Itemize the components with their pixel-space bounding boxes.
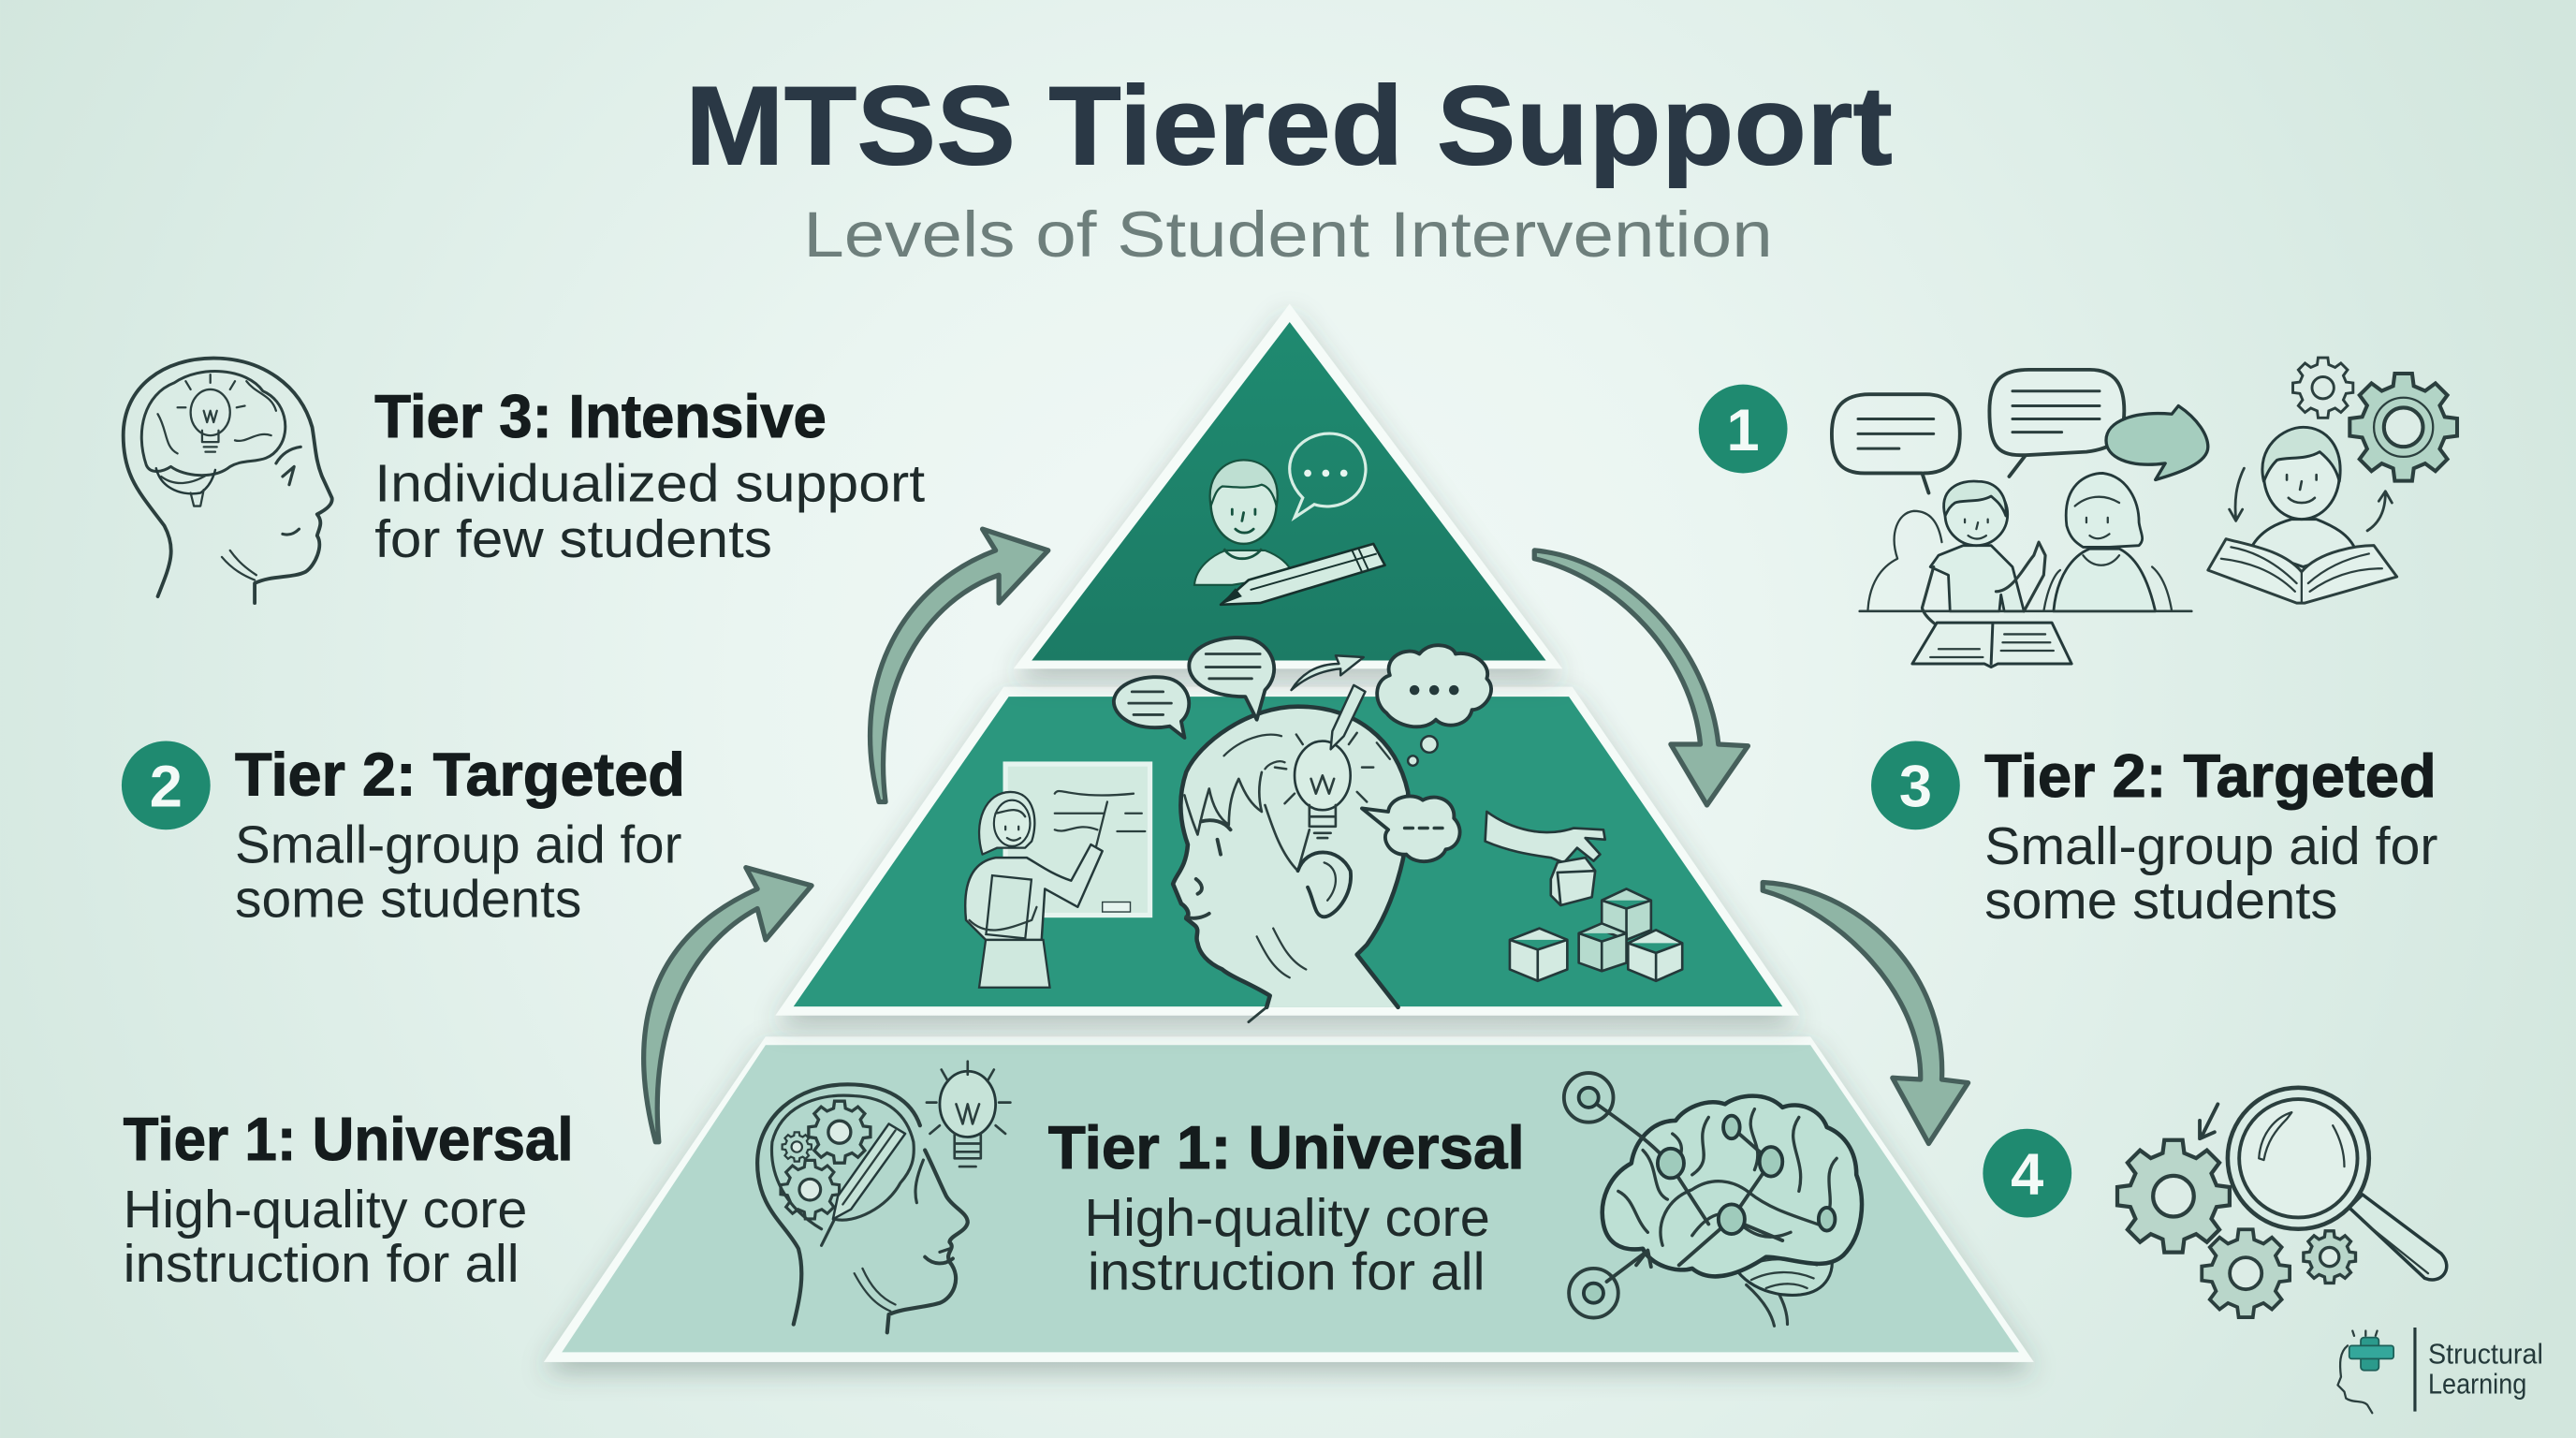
pyramid tier 2 middle xyxy=(775,687,1799,1016)
text block: Tier 2 Targeted right: 3 xyxy=(1899,755,1932,820)
illustration: teacher at board xyxy=(965,764,1150,988)
badge: 1: 1 xyxy=(1727,398,1760,463)
logo: Structural Learning: Structural xyxy=(2428,1338,2543,1371)
text block: Tier 3 Intensive: Individualized support xyxy=(374,453,926,512)
text block: Tier 1 Universal left xyxy=(124,1105,574,1293)
badge: 4: 4 xyxy=(2011,1142,2043,1208)
text block: Tier 1 Universal center xyxy=(1048,1113,1525,1301)
text block: Tier 1 Universal left: instruction for all xyxy=(124,1234,520,1293)
arrow: upper left xyxy=(871,529,1048,801)
pyramid tier 3 top xyxy=(1014,304,1562,668)
text block: Tier 3 Intensive xyxy=(374,382,926,568)
illustration: gears and magnifying glass xyxy=(2117,1088,2447,1317)
arrow: upper right xyxy=(1534,550,1748,805)
arrow: lower left xyxy=(644,868,812,1142)
icon: open book on table xyxy=(1912,623,2071,668)
illustration: networked brain xyxy=(1564,1073,1862,1326)
illustration: student with book and gears xyxy=(2208,358,2457,603)
text block: Tier 1 Universal center: Tier 1: Universal xyxy=(1048,1113,1525,1181)
text block: Tier 2 Targeted left: Small-group aid for xyxy=(235,814,681,873)
text block: Tier 2 Targeted right: some students xyxy=(1984,871,2337,930)
text block: Tier 2 Targeted right xyxy=(1871,741,2438,930)
logo: Structural Learning xyxy=(2337,1328,2543,1413)
pyramid tier 1 base xyxy=(544,1036,2034,1362)
illustration: silhouette behind table xyxy=(1868,511,1942,609)
subtitle: Levels of Student Intervention xyxy=(803,198,1773,271)
text block: Tier 2 Targeted left: some students xyxy=(235,869,581,928)
decorative table line xyxy=(1860,610,2191,612)
badge: 4 xyxy=(1983,1129,2071,1217)
illustration: hand and blocks xyxy=(1486,812,1682,981)
illustration: woman at table xyxy=(2043,473,2172,611)
icon: head with brain and bulb xyxy=(124,359,332,603)
text block: Tier 1 Universal center: High-quality core xyxy=(1084,1188,1490,1247)
text block: Tier 2 Targeted left: Tier 2: Targeted xyxy=(235,740,685,808)
text block: Tier 3 Intensive: Tier 3: Intensive xyxy=(374,382,827,450)
text block: Tier 2 Targeted right: Small-group aid for xyxy=(1984,816,2438,875)
icon: speech bubble one xyxy=(1832,394,1960,493)
text block: Tier 2 Targeted left: 2 xyxy=(150,755,183,820)
arrow: lower right xyxy=(1763,882,1969,1143)
text block: Tier 2 Targeted right: Tier 2: Targeted xyxy=(1984,741,2437,810)
badge: 1 xyxy=(1699,385,1788,473)
icon: filled green bubble xyxy=(2106,405,2208,479)
illustration: boy at table xyxy=(1922,481,2045,644)
title: MTSS Tiered Support xyxy=(685,65,1893,189)
logo: Structural Learning: Learning xyxy=(2428,1367,2526,1400)
icon: speech bubble two xyxy=(1989,370,2124,477)
icon: student with speech bubble and pencil xyxy=(1194,433,1385,605)
illustration: big student head with bulb xyxy=(1114,638,1491,1022)
text block: Tier 2 Targeted left xyxy=(122,740,685,928)
text block: Tier 1 Universal left: High-quality core xyxy=(124,1180,527,1239)
illustration: head with gears and pencil xyxy=(757,1062,1010,1332)
text block: Tier 3 Intensive: for few students xyxy=(374,509,772,568)
illustration: speech bubbles and students at table xyxy=(1832,370,2208,668)
text block: Tier 1 Universal center: instruction for all xyxy=(1088,1242,1486,1301)
text block: Tier 1 Universal left: Tier 1: Universal xyxy=(124,1105,574,1173)
